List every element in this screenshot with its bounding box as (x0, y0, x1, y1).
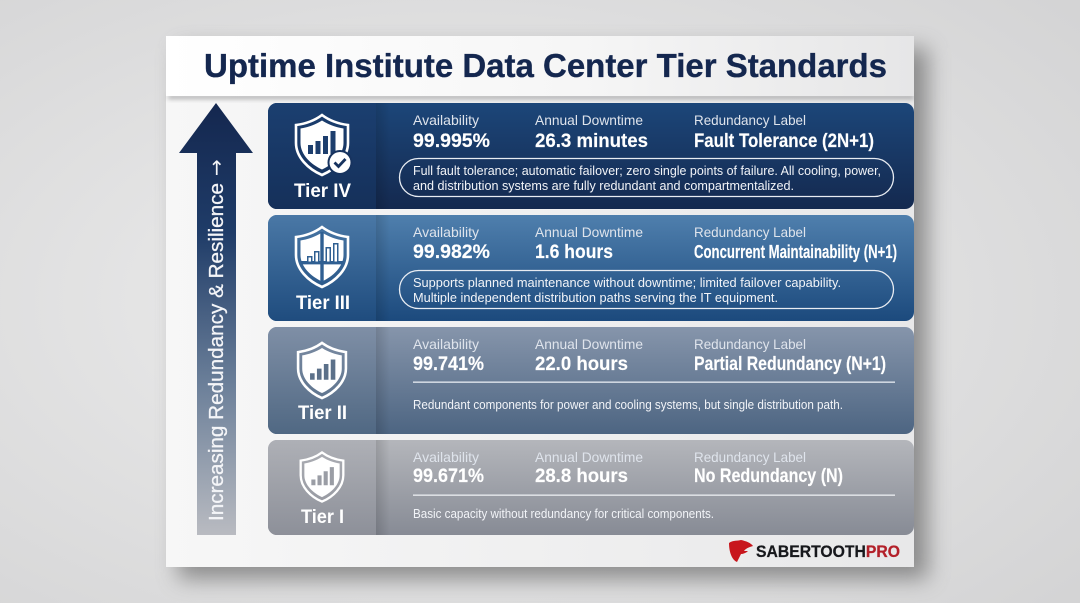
panel: Tier III (268, 215, 914, 321)
metric: redundancy label: Redundancy Label (694, 224, 806, 240)
description: Basic capacity without redundancy for critical components. (413, 507, 714, 521)
panel: title header (166, 36, 914, 99)
description pill: Multiple independent distribution paths serving the IT equipment. (413, 290, 778, 305)
metric: redundancy label (694, 112, 874, 152)
metric: redundancy label: Partial Redundancy (N+1) (694, 353, 886, 375)
metric: annual downtime: 26.3 minutes (535, 130, 648, 152)
icon: shield with check (296, 115, 352, 175)
tier label: Tier IV (294, 181, 351, 202)
metric: redundancy label: Fault Tolerance (2N+1) (694, 130, 874, 152)
panel: card (166, 36, 928, 579)
metric: redundancy label (694, 224, 897, 262)
tier label: Tier II (298, 403, 347, 424)
metric: annual downtime: Annual Downtime (535, 449, 643, 465)
panel: Tier I (268, 440, 914, 535)
metric: redundancy label: Concurrent Maintainability (N+1) (694, 242, 897, 262)
description pill: Full fault tolerance; automatic failover; zero single points of failure. All cooling, power, (413, 163, 881, 178)
metric: redundancy label: Redundancy Label (694, 449, 806, 465)
icon: shield with quadrants (296, 227, 348, 287)
metric: redundancy label (694, 449, 843, 487)
metric: availability: 99.741% (413, 353, 484, 375)
wordmark: SABERTOOTHPRO (756, 543, 900, 561)
metric: availability: Availability (413, 224, 479, 240)
metric: annual downtime (535, 112, 648, 152)
metric: redundancy label: No Redundancy (N) (694, 465, 843, 487)
metric: redundancy label (694, 336, 886, 375)
icon: shield with bars (298, 343, 346, 398)
icon: shield with bars (301, 452, 343, 502)
panel: Tier IV (268, 103, 914, 209)
arrow label: → (204, 159, 228, 176)
metric: availability (413, 112, 490, 152)
metric: annual downtime (535, 336, 643, 375)
metric: annual downtime: 28.8 hours (535, 465, 628, 487)
metric: availability: Availability (413, 449, 479, 465)
metric: availability: Availability (413, 336, 479, 352)
metric: availability (413, 336, 484, 375)
description pill (400, 158, 894, 196)
panel: Tier II (268, 327, 914, 434)
tier label: Tier I (301, 507, 344, 528)
metric: availability: 99.671% (413, 465, 484, 487)
title: Uptime Institute Data Center Tier Standards (204, 47, 887, 84)
metric: availability: 99.982% (413, 241, 490, 263)
metric: annual downtime: Annual Downtime (535, 112, 643, 128)
metric: availability: Availability (413, 112, 479, 128)
metric: annual downtime: 1.6 hours (535, 241, 613, 263)
metric: availability (413, 224, 490, 263)
logo: Sabertooth Pro (729, 540, 900, 562)
metric: redundancy label: Redundancy Label (694, 336, 806, 352)
description pill: Supports planned maintenance without downtime; limited failover capability. (413, 275, 841, 290)
metric: annual downtime (535, 449, 643, 487)
metric: availability (413, 449, 484, 487)
metric: annual downtime: Annual Downtime (535, 336, 643, 352)
metric: annual downtime (535, 224, 643, 263)
arrow: increasing redundancy and resilience (179, 103, 253, 535)
metric: redundancy label: Redundancy Label (694, 112, 806, 128)
metric: annual downtime: 22.0 hours (535, 353, 628, 375)
tier label: Tier III (296, 293, 350, 314)
metric: annual downtime: Annual Downtime (535, 224, 643, 240)
arrow label: Increasing Redundancy & Resilience (206, 183, 228, 521)
description pill (400, 270, 894, 308)
description pill: and distribution systems are fully redundant and compartmentalized. (413, 178, 794, 193)
description: Redundant components for power and cooling systems, but single distribution path. (413, 398, 843, 412)
metric: availability: 99.995% (413, 130, 490, 152)
icon: sabertooth head (729, 540, 753, 562)
